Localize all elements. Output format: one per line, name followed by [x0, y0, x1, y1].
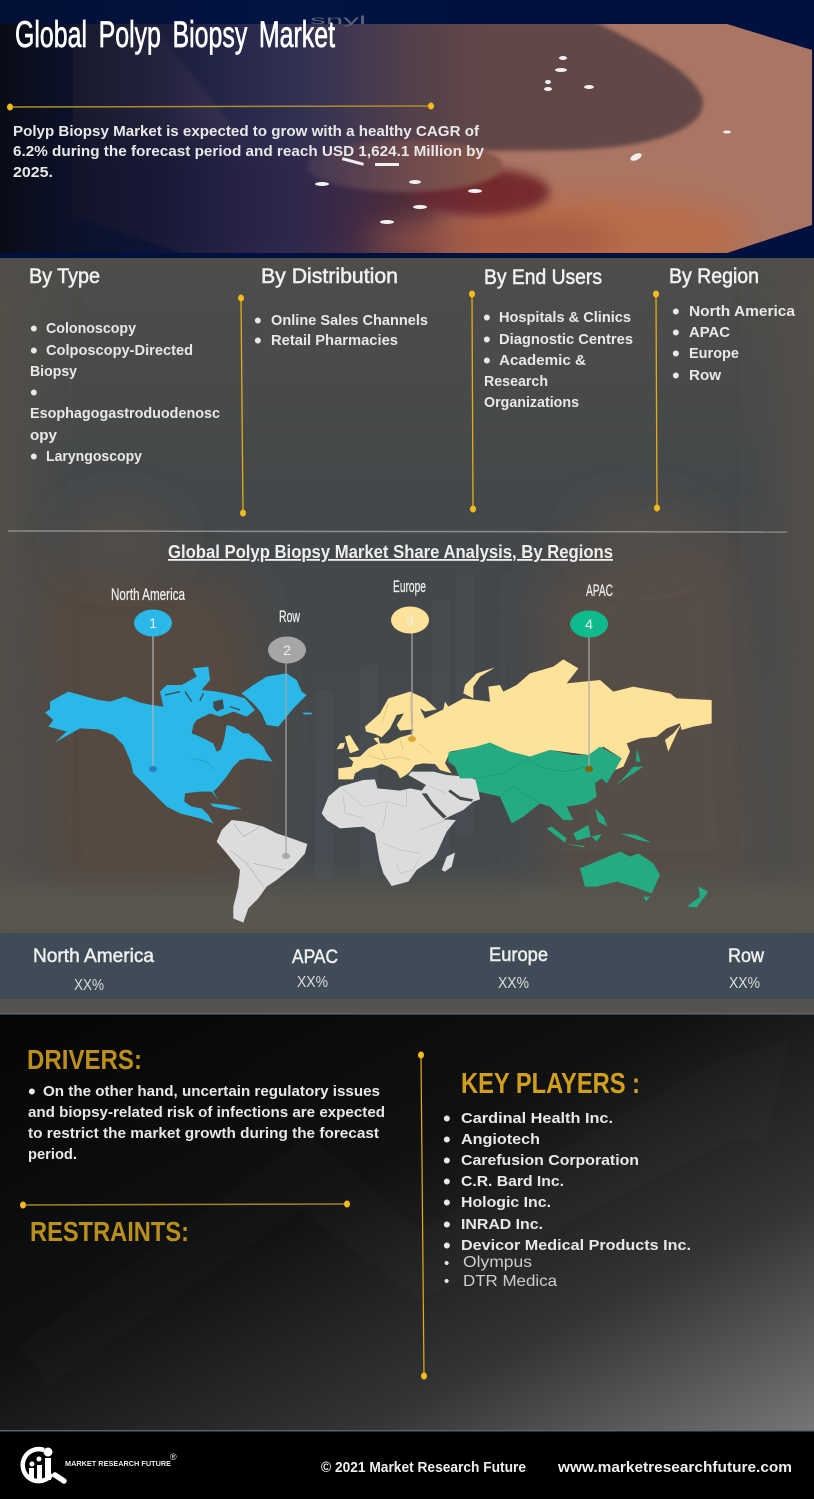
intro text: 6.2% during the forecast period and reach USD 1,624.1 Million by [13, 143, 485, 160]
panel: by end users: • [483, 305, 491, 330]
panel: by distribution [254, 265, 428, 353]
logo wordmark: MARKET RESEARCH FUTURE [65, 1459, 171, 1468]
key players list: • [443, 1106, 451, 1131]
panel: by type: Colposcopy-Directed [46, 342, 193, 359]
panel: by distribution: • [254, 308, 262, 333]
drivers heading: DRIVERS: [27, 1044, 142, 1075]
logo wordmark [65, 1452, 177, 1468]
drivers text: On the other hand, uncertain regulatory issues [43, 1083, 380, 1100]
panel: by region: • [672, 341, 680, 366]
panel: by distribution: Retail Pharmacies [271, 332, 398, 349]
panel: by distribution: • [254, 328, 262, 353]
share: row [728, 946, 764, 992]
drivers text: and biopsy-related risk of infections are expected [28, 1104, 385, 1121]
panel: by region: By Region [669, 265, 759, 288]
key players list: DTR Medica [463, 1273, 557, 1290]
share: apac: XX% [297, 974, 328, 991]
panel: by type: • [30, 444, 38, 469]
pin: north america: 1 [149, 615, 157, 631]
key players list: Devicor Medical Products Inc. [461, 1237, 691, 1254]
pin: north america [111, 585, 185, 772]
intro text: Polyp Biopsy Market is expected to grow with a healthy CAGR of [13, 123, 480, 140]
panel: by end users: By End Users [484, 266, 602, 289]
panel: by type: • [30, 338, 38, 363]
panel: by type [29, 265, 220, 469]
pin: apac: 4 [585, 616, 593, 632]
key players list: • [444, 1273, 449, 1290]
hero divider line [7, 102, 434, 110]
key players list: • [443, 1212, 451, 1237]
key players list: Cardinal Health Inc. [461, 1110, 613, 1127]
panel: by region: Row [689, 367, 721, 384]
panel: drivers restraints key players [0, 1013, 814, 1430]
website: www.marketresearchfuture.com [557, 1459, 792, 1476]
panel: by end users: Hospitals & Clinics [499, 309, 631, 326]
panel: by region [669, 265, 796, 388]
pin: row: Row [279, 607, 300, 626]
key players heading: KEY PLAYERS : [461, 1068, 640, 1100]
key players list: • [443, 1190, 451, 1215]
panel: by distribution: Online Sales Channels [271, 312, 428, 329]
background arrow watermark [20, 1040, 790, 1385]
share: row: XX% [729, 975, 760, 992]
share: europe [489, 945, 548, 992]
panel: by type: Esophagogastroduodenosc [30, 405, 220, 422]
panel: hero banner [0, 0, 814, 275]
copyright: © 2021 Market Research Future [321, 1459, 526, 1476]
pin: europe: 3 [406, 612, 414, 628]
panel: by end users: Diagnostic Centres [499, 331, 633, 348]
drivers text: to restrict the market growth during the forecast [28, 1125, 379, 1142]
panel: by end users: • [483, 348, 491, 373]
panel: by region: • [672, 320, 680, 345]
share: apac [292, 947, 338, 991]
restraints heading: RESTRAINTS: [30, 1216, 189, 1247]
key players list: Olympus [463, 1254, 532, 1271]
panel: by end users: • [483, 327, 491, 352]
panel: by type: • [30, 380, 38, 405]
drivers text: • [28, 1079, 36, 1104]
gold column separators [238, 290, 660, 516]
panel: by type: Biopsy [30, 363, 78, 380]
panel: by end users: Organizations [484, 394, 579, 411]
key players list: • [444, 1255, 449, 1272]
drivers text: period. [28, 1146, 77, 1163]
panel: by end users: Research [484, 373, 548, 390]
map: europe and russia [337, 659, 712, 779]
panel: by region: APAC [689, 324, 730, 341]
panel: by distribution: By Distribution [261, 265, 398, 288]
horizontal gold divider [20, 1200, 350, 1208]
panel: by region: Europe [689, 345, 739, 362]
panel: footer [0, 1430, 814, 1499]
hero colour fade [0, 0, 814, 258]
panel: by type: • [30, 316, 38, 341]
map: south america [217, 820, 307, 923]
panel: by type: Colonoscopy [46, 320, 137, 337]
pin: north america: North America [111, 585, 185, 604]
panel: by type: Laryngoscopy [46, 448, 143, 465]
key players list: INRAD Inc. [461, 1216, 543, 1233]
pin: apac [570, 581, 613, 772]
share: europe: Europe [489, 945, 548, 966]
panel: segments and map background [0, 258, 814, 933]
share: row: Row [728, 946, 764, 967]
share: north america: XX% [74, 977, 104, 994]
key players list: • [443, 1127, 451, 1152]
panel: by type: By Type [29, 265, 100, 288]
hero highlights [315, 56, 731, 224]
key players list: • [443, 1148, 451, 1173]
key players list: • [443, 1169, 451, 1194]
share: north america: North America [33, 946, 154, 967]
map: asia pacific [448, 743, 708, 907]
key players list: Carefusion Corporation [461, 1152, 639, 1169]
key players list: • [443, 1233, 451, 1258]
map heading: Global Polyp Biopsy Market Share Analysis, By Regions [168, 542, 613, 562]
key players list: Hologic Inc. [461, 1194, 551, 1211]
key players list: Angiotech [461, 1131, 540, 1148]
pin: europe [391, 577, 429, 742]
share: apac: APAC [292, 947, 338, 968]
panel: by region: North America [689, 303, 796, 320]
world map [45, 659, 712, 923]
title: Global Polyp Biopsy Market [15, 14, 335, 55]
panel: by end users: Academic & [499, 352, 586, 369]
pin: europe: Europe [393, 577, 426, 596]
logo wordmark: ® [170, 1452, 177, 1462]
map: africa and middle east [322, 772, 480, 886]
share: north america [33, 946, 154, 994]
panel: regional share band [0, 933, 814, 1014]
pin: row [268, 607, 306, 859]
icon: market research future logo [23, 1448, 64, 1481]
intro text: 2025. [13, 164, 53, 181]
map: north america [45, 667, 312, 823]
intro text [13, 123, 485, 181]
key players list [443, 1106, 691, 1290]
panel: by region: • [672, 299, 680, 324]
pin: row: 2 [283, 642, 291, 658]
faint scope overlay text: snyl [310, 13, 366, 27]
panel: by end users [483, 266, 633, 411]
panel: by region: • [672, 363, 680, 388]
vertical gold divider [418, 1052, 427, 1380]
panel: by type: opy [30, 427, 58, 444]
share: europe: XX% [498, 975, 529, 992]
hero endoscopy photograph [73, 24, 812, 253]
drivers text [28, 1079, 385, 1163]
key players list: C.R. Bard Inc. [461, 1173, 564, 1190]
pin: apac: APAC [586, 581, 613, 600]
